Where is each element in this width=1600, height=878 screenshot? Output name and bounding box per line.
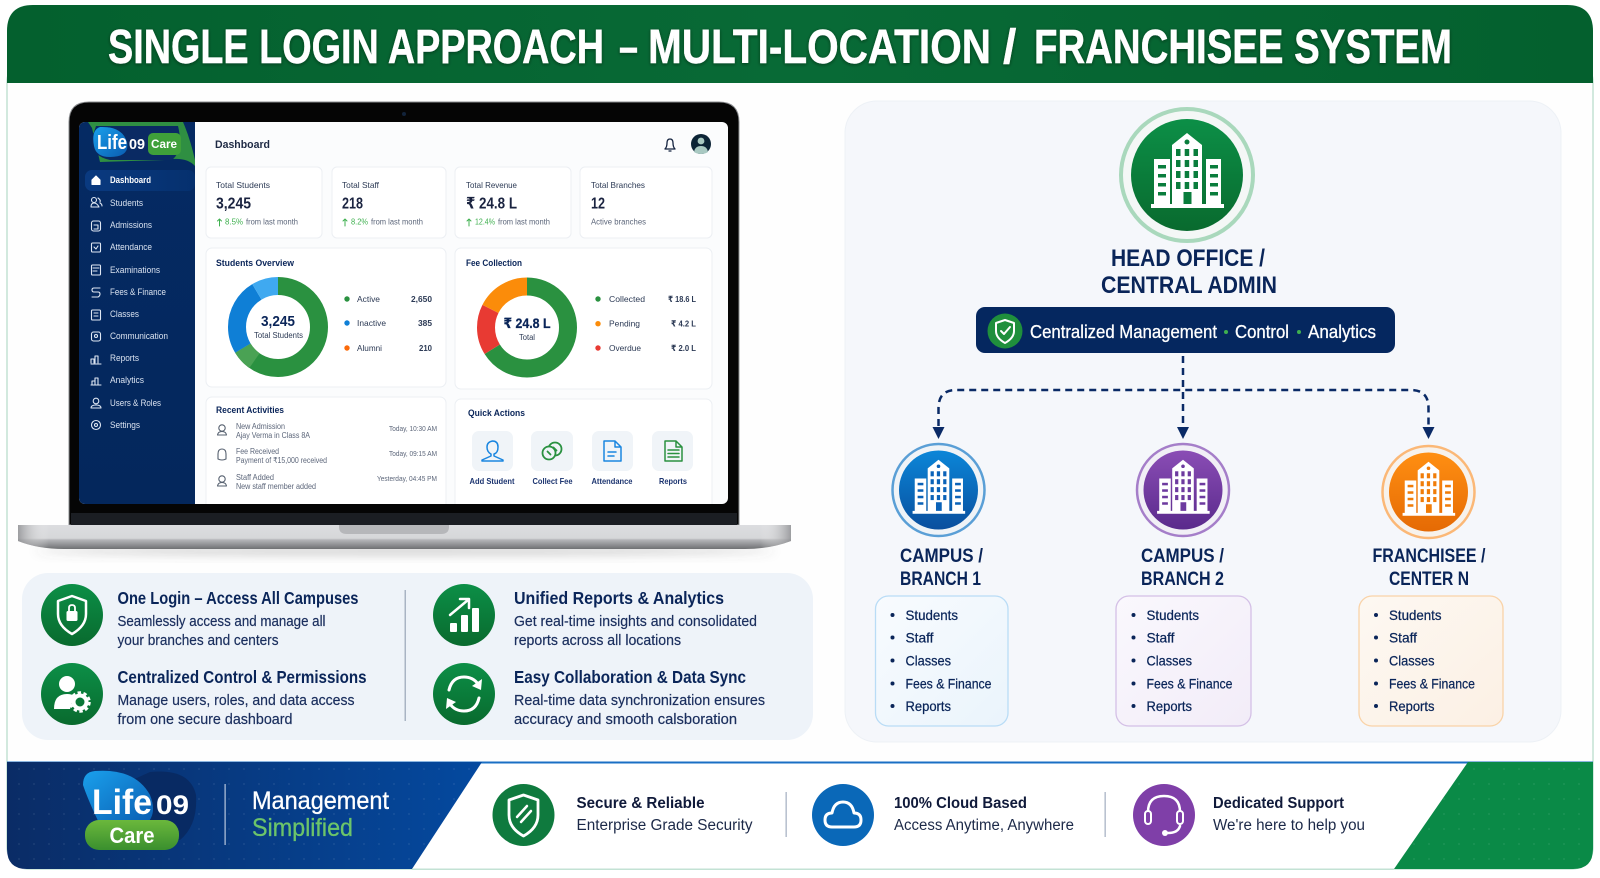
title: [108, 21, 1452, 74]
head office node: HEAD OFFICE /: [1111, 245, 1265, 272]
icon: sync arrows: [433, 663, 495, 725]
icon: user avatar: [691, 134, 711, 154]
menu items: Settings: [110, 420, 140, 430]
branch 1 list: [876, 596, 1008, 726]
menu items: Dashboard: [110, 175, 151, 185]
footer tagline: Simplified: [252, 814, 353, 842]
menu icons: [91, 176, 102, 430]
footer item: secure: Secure & Reliable: [576, 795, 705, 812]
laptop shadow: [35, 547, 775, 555]
legend: fees: ₹ 2.0 L: [671, 343, 696, 353]
stat card: total revenue: ₹ 24.8 L: [466, 196, 517, 212]
title: –: [619, 21, 638, 74]
icon: notification bell: [665, 139, 675, 151]
panel: recent activities: Payment of ₹15,000 received: [236, 456, 327, 465]
laptop lid: [69, 102, 739, 525]
footer item: cloud: [812, 784, 1074, 846]
menu items: Classes: [110, 309, 139, 319]
branch 1 node: BRANCH 1: [900, 569, 981, 590]
branch 1 node: [876, 444, 1008, 726]
stat card: total staff: Total Staff: [342, 180, 380, 190]
active menu item: [85, 170, 195, 191]
arrows: hierarchy connectors: [932, 356, 1434, 439]
activity icons: [218, 425, 226, 486]
feature: one login: Seamlessly access and manage all: [118, 613, 326, 630]
franchisee list: Classes: [1389, 652, 1434, 668]
feature: one login: your branches and centers: [118, 632, 278, 649]
menu items: [110, 175, 168, 430]
menu items: Admissions: [110, 220, 152, 230]
legend: students: 385: [418, 318, 432, 328]
stat card: total students: [206, 167, 322, 238]
legend: students: Inactive: [357, 318, 386, 328]
panel: recent activities: Yesterday, 04:45 PM: [377, 474, 437, 483]
footer tagline: [252, 787, 389, 842]
feature: unified reports: [433, 584, 757, 649]
footer logo: [83, 771, 196, 850]
panel: students overview: Students Overview: [216, 258, 295, 268]
footer item: cloud: 100% Cloud Based: [894, 795, 1027, 812]
footer logo: Care: [110, 823, 154, 848]
stat card: total students: 8.5%: [225, 216, 243, 226]
panel: quick actions: Add Student: [470, 476, 515, 486]
legend: fees: Pending: [609, 318, 640, 328]
laptop mockup: [18, 102, 791, 555]
header banner: [7, 5, 1593, 83]
centralized management pill: Analytics: [1308, 321, 1376, 342]
icon: cloud: [812, 784, 874, 846]
feature: easy collaboration: Easy Collaboration & Data Sync: [514, 667, 746, 687]
footer item: support: [1133, 784, 1365, 846]
footer item: secure: [492, 784, 753, 846]
stat card: total staff: from last month: [371, 218, 423, 226]
franchisee node: [1359, 446, 1503, 726]
panel: students overview: [206, 248, 446, 387]
panel: recent activities: Today, 09:15 AM: [389, 449, 437, 458]
panel: recent activities: New Admission: [236, 422, 285, 431]
legend: fees: [595, 294, 696, 353]
icon: growth chart: [433, 584, 495, 646]
panel: recent activities: Staff Added: [236, 473, 274, 482]
title: MULTI-LOCATION: [648, 21, 991, 74]
branch 1 node: CAMPUS /: [900, 546, 984, 567]
stat card: total staff: 8.2%: [351, 216, 368, 226]
branch 1 list: Classes: [906, 652, 951, 668]
title: SINGLE LOGIN APPROACH: [108, 21, 604, 74]
title: /: [1003, 21, 1016, 74]
stat card: total students: 3,245: [216, 196, 251, 212]
branch 2 list: Classes: [1146, 652, 1192, 668]
laptop base: [18, 525, 791, 549]
branch 2 list: [1116, 596, 1251, 726]
icon: shield lock: [41, 584, 103, 646]
dashboard heading: Dashboard: [215, 139, 270, 151]
footer item: support: Dedicated Support: [1213, 795, 1345, 812]
stat card: total staff: [332, 167, 446, 238]
stat card: total revenue: Total Revenue: [466, 180, 517, 190]
legend: fees: Collected: [609, 294, 645, 304]
stat card: total staff: 218: [342, 196, 363, 212]
franchisee list: Students: [1389, 607, 1442, 623]
divider: [404, 590, 406, 721]
sidebar logo: [93, 127, 181, 157]
branch 2 list: Reports: [1146, 698, 1192, 714]
stat card: total revenue: [455, 167, 571, 238]
icon: headset: [1133, 784, 1195, 846]
branch 2 node: BRANCH 2: [1141, 569, 1224, 590]
footer logo: 09: [156, 790, 189, 820]
feature: easy collaboration: Real-time data synchronization ensures: [514, 692, 765, 709]
stat card: total revenue: 12.4%: [475, 216, 495, 226]
franchisee node: CENTER N: [1389, 569, 1469, 590]
panel: key features: [22, 573, 813, 740]
panel: fee collection: ₹ 24.8 L: [504, 315, 551, 331]
branch 1 list: Fees & Finance: [906, 676, 992, 692]
branch 2 node: [1116, 444, 1251, 726]
icon: collect fee: [542, 442, 562, 460]
title: FRANCHISEE SYSTEM: [1034, 21, 1452, 74]
panel: recent activities: Ajay Verma in Class 8A: [236, 431, 311, 440]
panel: recent activities: Recent Activities: [216, 405, 284, 415]
stat card: total students: from last month: [246, 218, 298, 226]
sidebar logo: Care: [151, 137, 177, 151]
panel: quick actions: Reports: [659, 476, 687, 486]
legend: fees: ₹ 18.6 L: [668, 294, 696, 304]
legend: students: 210: [419, 343, 432, 353]
branch 2 node: CAMPUS /: [1141, 546, 1225, 567]
feature: easy collaboration: accuracy and smooth calsboration: [514, 711, 737, 728]
icon: head office building: [1121, 109, 1253, 241]
sidebar: [79, 122, 195, 504]
menu items: Users & Roles: [110, 398, 161, 408]
menu items: Communication: [110, 331, 168, 341]
feature: unified reports: Get real-time insights and consolidated: [514, 613, 757, 630]
panel: students overview: 3,245: [261, 313, 295, 330]
icon: user and gear: [41, 663, 103, 725]
menu items: Attendance: [110, 242, 152, 252]
feature: centralized control: from one secure dashboard: [118, 711, 292, 728]
icon: shield check: [988, 314, 1022, 348]
legend: students: [344, 294, 432, 353]
panel: fee collection: Fee Collection: [466, 258, 522, 268]
head office node: [1101, 109, 1277, 299]
feature: centralized control: Manage users, roles, and data access: [118, 692, 354, 709]
action tiles: [472, 431, 693, 471]
panel: quick actions: [454, 398, 712, 504]
feature: one login: One Login – Access All Campuses: [118, 588, 359, 608]
branch 2 list: Fees & Finance: [1146, 676, 1233, 692]
branch 1 list: Staff: [906, 630, 934, 646]
branch 1 list: Students: [906, 607, 958, 623]
panel: recent activities: Today, 10:30 AM: [389, 424, 437, 433]
panel: quick actions: Collect Fee: [532, 476, 573, 486]
icon: shield: [492, 784, 554, 846]
donut chart: students: [237, 286, 319, 368]
franchisee list: [1359, 596, 1503, 726]
branch 1 list: Reports: [906, 698, 951, 714]
footer item: cloud: Access Anytime, Anywhere: [894, 817, 1074, 834]
feature: centralized control: [41, 663, 367, 728]
icon: branch 2 building: [1137, 444, 1229, 536]
franchisee list: Fees & Finance: [1389, 676, 1475, 692]
branch 2 list: Students: [1146, 607, 1199, 623]
head office node: CENTRAL ADMIN: [1101, 272, 1277, 299]
panel: recent activities: New staff member added: [236, 482, 316, 491]
icon: franchisee building: [1382, 446, 1474, 538]
icon: add student: [482, 441, 503, 461]
stat card: total branches: 12: [591, 196, 605, 212]
sidebar logo: 09: [129, 136, 145, 153]
feature: unified reports: reports across all locations: [514, 632, 681, 649]
stat card: total students: Total Students: [216, 180, 270, 190]
stat card: total revenue: from last month: [498, 218, 550, 226]
centralized management pill: [976, 307, 1395, 353]
panel: fee collection: Total: [519, 333, 535, 342]
legend: students: Active: [357, 294, 380, 304]
footer item: support: We're here to help you: [1213, 817, 1365, 834]
sidebar logo: Life: [97, 132, 127, 154]
footer tagline: Management: [252, 787, 389, 815]
panel: organisation hierarchy: [845, 101, 1561, 742]
franchisee list: Reports: [1389, 698, 1434, 714]
icon: reports document: [665, 441, 682, 461]
panel: quick actions: Quick Actions: [468, 408, 525, 418]
footer item: secure: Enterprise Grade Security: [576, 817, 753, 834]
icon: attendance document: [604, 441, 621, 461]
centralized management pill: Centralized Management: [1030, 321, 1217, 342]
centralized management pill: Control: [1235, 321, 1289, 342]
legend: fees: Overdue: [609, 343, 641, 353]
feature: easy collaboration: [433, 663, 765, 728]
menu items: Students: [110, 198, 143, 208]
panel: recent activities: [206, 396, 446, 504]
stat card: total branches: Total Branches: [591, 180, 645, 190]
panel: students overview: Total Students: [254, 331, 303, 340]
footer brand block: [7, 762, 482, 869]
menu items: Examinations: [110, 265, 160, 275]
legend: fees: ₹ 4.2 L: [671, 318, 696, 328]
branch 2 list: Staff: [1146, 630, 1175, 646]
footer green corner: [1394, 762, 1593, 869]
menu items: Analytics: [110, 375, 144, 385]
menu items: Reports: [110, 353, 139, 363]
menu items: Fees & Finance: [110, 287, 166, 297]
legend: students: 2,650: [411, 294, 432, 304]
feature: one login: [41, 584, 359, 649]
panel: recent activities: Fee Received: [236, 447, 279, 456]
panel: fee collection: [455, 248, 712, 389]
franchisee node: FRANCHISEE /: [1372, 546, 1486, 567]
panel: quick actions: Attendance: [592, 476, 633, 486]
laptop screen: [79, 122, 728, 519]
legend: students: Alumni: [357, 343, 382, 353]
feature: unified reports: Unified Reports & Analytics: [514, 588, 724, 608]
stat card: total branches: Active branches: [591, 218, 646, 226]
footer logo: Life: [92, 783, 152, 822]
feature: centralized control: Centralized Control & Permissions: [118, 667, 367, 687]
franchisee list: Staff: [1389, 630, 1417, 646]
icon: branch 1 building: [892, 444, 984, 536]
footer band: [7, 762, 1593, 870]
donut chart: fees: [486, 286, 568, 368]
stat card: total branches: [580, 167, 712, 238]
